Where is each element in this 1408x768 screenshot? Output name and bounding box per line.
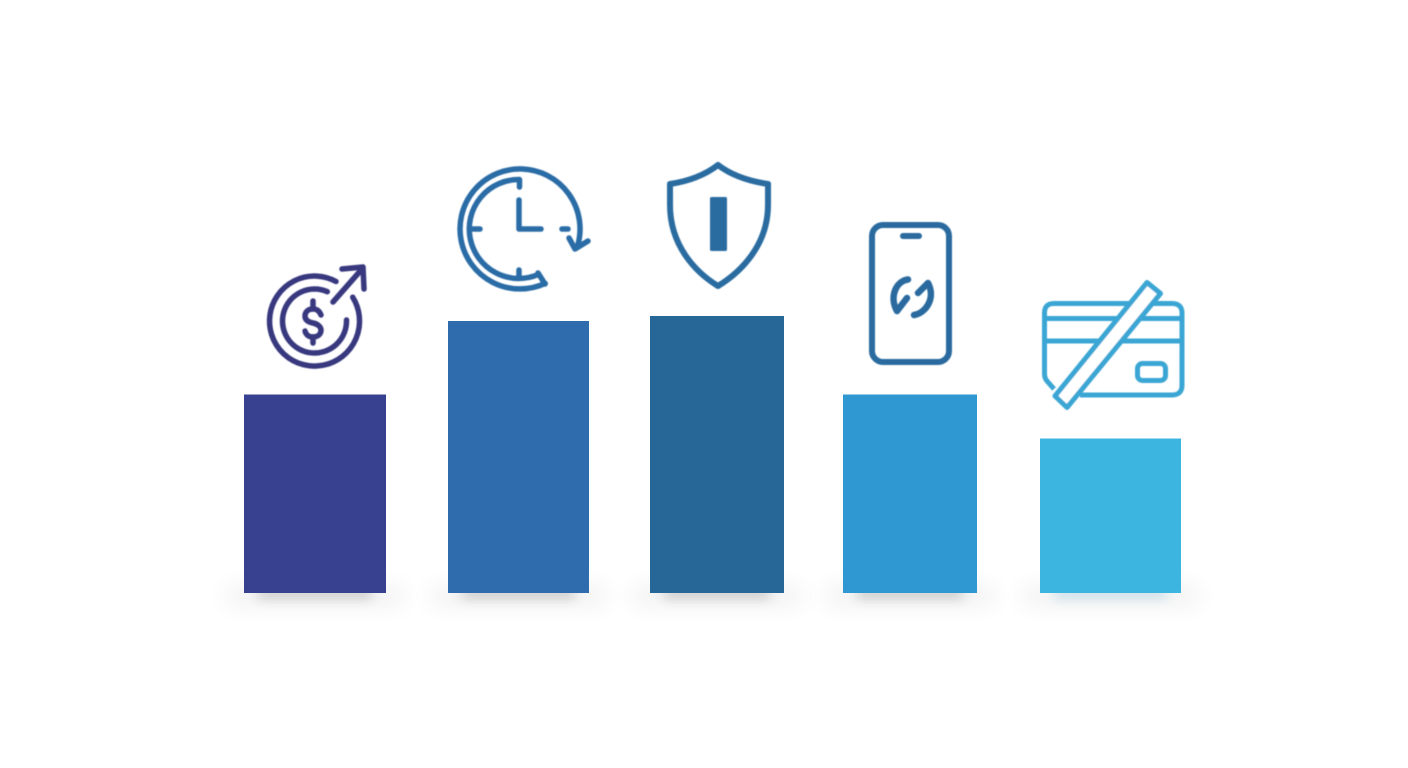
bar shadows xyxy=(226,588,1199,604)
icon: dollar coin with growth arrow xyxy=(270,267,364,366)
icon: smartphone with sync arrows xyxy=(872,225,949,362)
bar 3: steel blue xyxy=(650,316,784,593)
bar 2: blue xyxy=(448,321,589,593)
bar 4: bright blue xyxy=(843,394,977,593)
icon: crossed-out credit card xyxy=(1044,282,1182,408)
icon: shield xyxy=(670,165,768,286)
icon: clock with circular arrow xyxy=(460,169,588,289)
bar 1: navy xyxy=(244,394,386,593)
bar 5: sky blue xyxy=(1040,438,1181,593)
